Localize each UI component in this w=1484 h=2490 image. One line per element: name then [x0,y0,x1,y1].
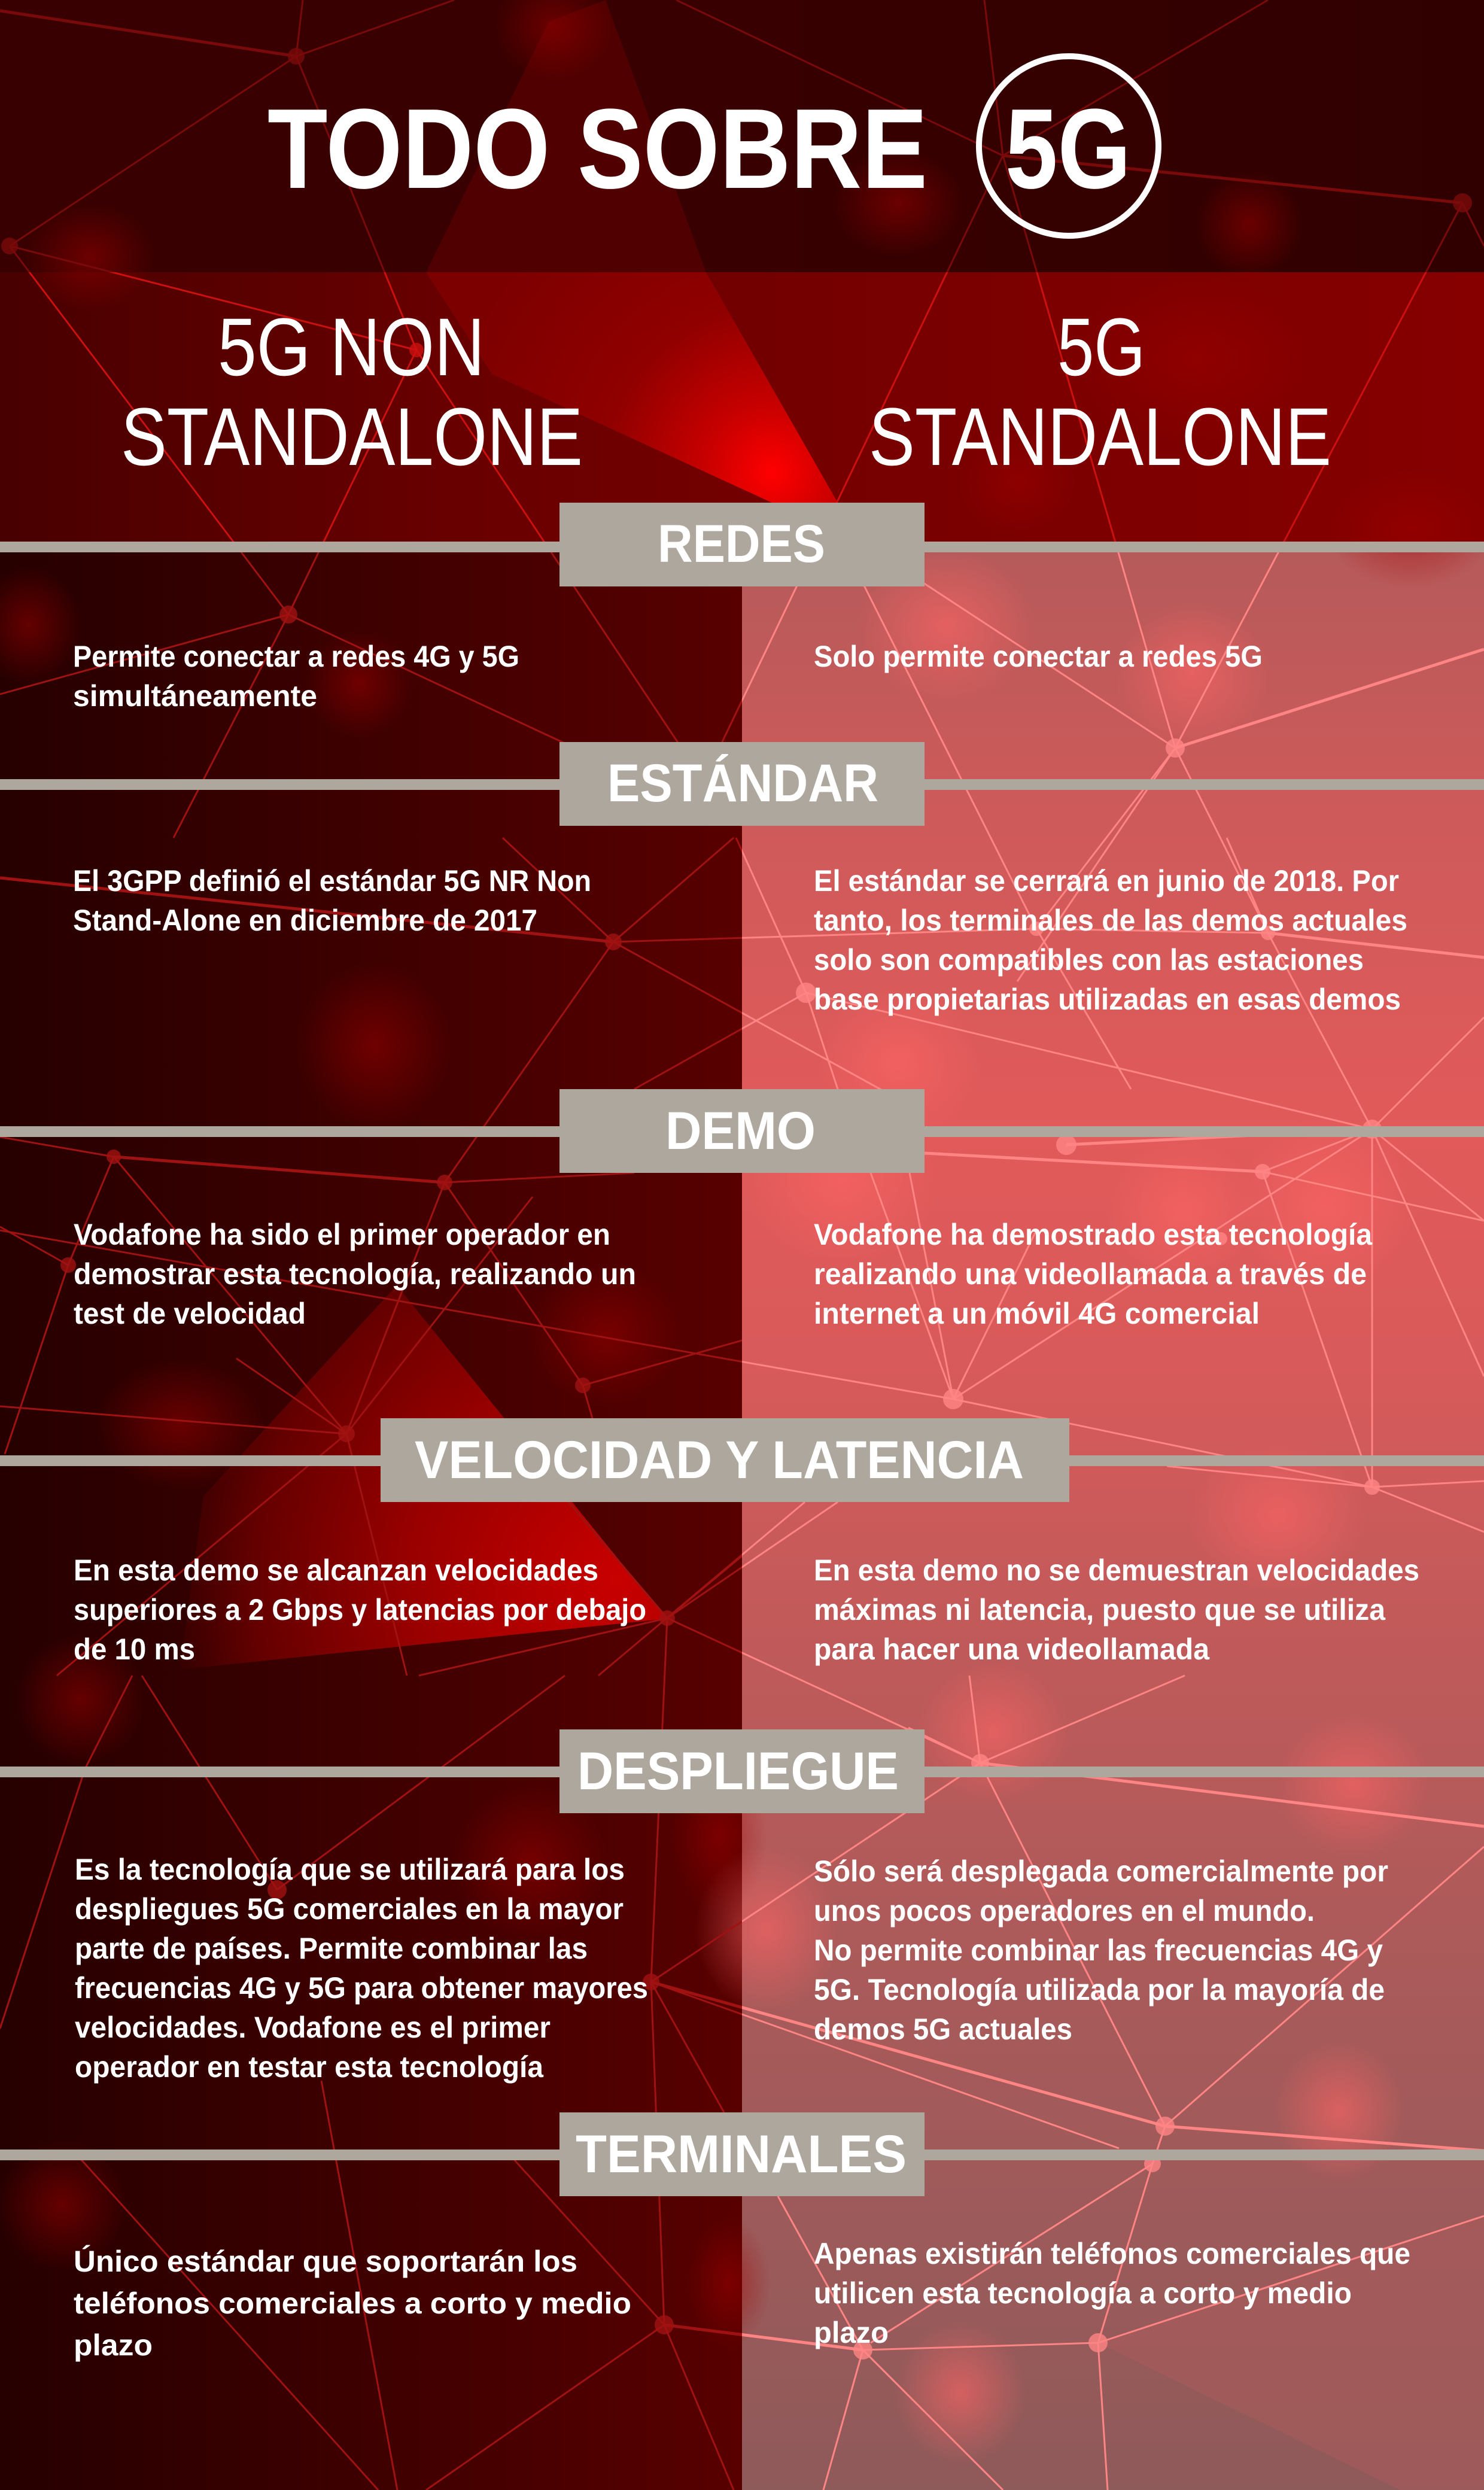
text: Despliegue standalone: Sólo será desplegada comercialmente por [814,1854,1388,1888]
column heading: 5G Standalone: STANDALONE [869,391,1331,483]
text: Demo non standalone: demostrar esta tecnología, realizando un [74,1257,636,1291]
text: Despliegue non standalone [75,1853,648,2084]
section band: Terminales [0,2112,1484,2196]
text: Velocidad standalone: máximas ni latencia, puesto que se utiliza [814,1593,1386,1626]
column heading: 5G Non Standalone: 5G NON [218,302,485,393]
text: Despliegue non standalone: Es la tecnología que se utilizará para los [75,1853,625,1886]
text: Despliegue non standalone: operador en testar esta tecnología [75,2050,544,2084]
text: Velocidad non standalone: de 10 ms [74,1632,195,1666]
text: Terminales non standalone [74,2245,631,2362]
text: Despliegue standalone: unos pocos operadores en el mundo. [814,1894,1315,1927]
text: Demo standalone: Vodafone ha demostrado esta tecnología [814,1218,1373,1251]
column heading: 5G Non Standalone [121,302,583,483]
text: Demo standalone: internet a un móvil 4G comercial [814,1297,1260,1330]
text: Demo non standalone: test de velocidad [74,1297,306,1330]
section band: Terminales: TERMINALES [576,2124,907,2184]
text: Terminales non standalone: teléfonos comerciales a corto y medio [74,2287,631,2320]
text: Demo standalone [814,1218,1373,1330]
title [267,56,1158,236]
text: Estándar non standalone [73,864,591,937]
text: Despliegue non standalone: frecuencias 4G y 5G para obtener mayores [75,1971,648,2005]
badge: 5G in circle [979,56,1158,236]
text: Velocidad standalone: para hacer una videollamada [814,1632,1210,1666]
section band: Redes [0,503,1484,586]
badge: 5G in circle: 5G [1005,86,1131,212]
text: Despliegue standalone: 5G. Tecnología utilizada por la mayoría de [814,1973,1385,2006]
section band: Estándar: ESTÁNDAR [607,753,878,813]
text: Demo non standalone [74,1218,636,1330]
text: Despliegue standalone [814,1854,1388,2046]
text: Redes non standalone: Permite conectar a redes 4G y 5G [73,640,519,673]
section band: Despliegue [0,1729,1484,1813]
text: Redes standalone: Solo permite conectar a redes 5G [814,640,1263,673]
text: Despliegue non standalone: despliegues 5G comerciales en la mayor [75,1892,624,1926]
text: Terminales standalone [814,2237,1410,2349]
section band: Demo: DEMO [665,1100,816,1160]
section band: Estándar [0,742,1484,826]
text: Estándar standalone: El estándar se cerrará en junio de 2018. Por [814,864,1399,898]
text: Despliegue non standalone: parte de países. Permite combinar las [75,1932,588,1965]
column heading: 5G Standalone: 5G [1057,302,1145,393]
text: Estándar standalone [814,864,1407,1016]
text: Estándar standalone: base propietarias utilizadas en esas demos [814,983,1401,1016]
text: Velocidad non standalone: superiores a 2 Gbps y latencias por debajo [74,1593,646,1626]
text: Terminales standalone: utilicen esta tecnología a corto y medio [814,2276,1352,2310]
text: Terminales standalone: Apenas existirán teléfonos comerciales que [814,2237,1410,2270]
section band: Velocidad y latencia [0,1418,1484,1502]
text: Despliegue standalone: No permite combinar las frecuencias 4G y [814,1933,1383,1967]
text: Velocidad non standalone [74,1553,646,1666]
text: Demo standalone: realizando una videollamada a través de [814,1257,1367,1291]
section band: Redes: REDES [658,513,825,573]
column heading: 5G Non Standalone: STANDALONE [121,391,583,483]
column heading: 5G Standalone [869,302,1331,483]
text: Redes non standalone: simultáneamente [73,679,317,713]
text: Terminales standalone: plazo [814,2316,889,2349]
section band: Despliegue: DESPLIEGUE [577,1741,899,1801]
text: Terminales non standalone: plazo [74,2328,153,2362]
text: Velocidad standalone: En esta demo no se demuestran velocidades [814,1553,1419,1587]
title: TODO SOBRE [267,86,928,212]
text: Velocidad standalone [814,1553,1419,1666]
text: Despliegue non standalone: velocidades. Vodafone es el primer [75,2011,551,2044]
text: Estándar standalone: tanto, los terminales de las demos actuales [814,904,1407,937]
text: Estándar standalone: solo son compatibles con las estaciones [814,943,1364,977]
section band: Velocidad y latencia: VELOCIDAD Y LATENCIA [415,1430,1024,1489]
text: Estándar non standalone: Stand-Alone en diciembre de 2017 [73,904,537,937]
text: Velocidad non standalone: En esta demo se alcanzan velocidades [74,1553,598,1587]
text: Redes non standalone [73,640,519,713]
text: Estándar non standalone: El 3GPP definió el estándar 5G NR Non [73,864,591,898]
text: Demo non standalone: Vodafone ha sido el primer operador en [74,1218,610,1251]
section band: Demo [0,1089,1484,1173]
text: Terminales non standalone: Único estándar que soportarán los [74,2245,577,2278]
text: Despliegue standalone: demos 5G actuales [814,2012,1072,2046]
